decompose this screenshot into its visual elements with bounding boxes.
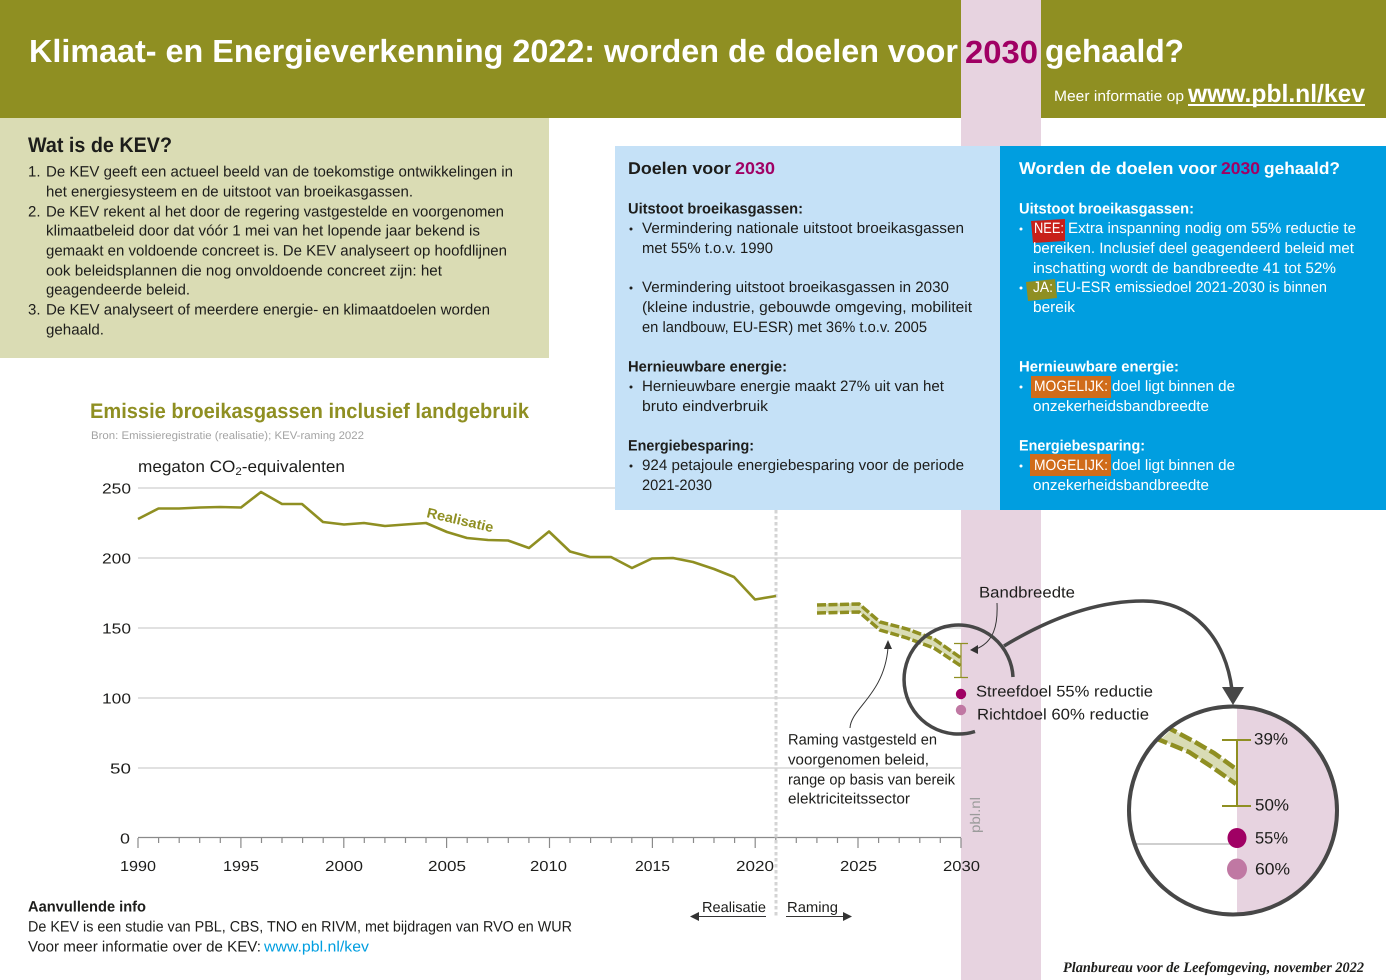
x axis labels	[120, 859, 980, 875]
y axis labels: 100	[102, 692, 131, 708]
answers energy saving: doel ligt binnen de	[1112, 457, 1235, 474]
x axis labels: 1995	[223, 859, 259, 875]
bandwidth bracket	[954, 644, 968, 678]
divider realisation / projection	[774, 510, 778, 918]
additional info	[28, 898, 572, 956]
badge: NEE: NEE:	[1034, 220, 1064, 237]
answers emissions: Uitstoot broeikasgassen:	[1019, 200, 1194, 218]
additional info: De KEV is een studie van PBL, CBS, TNO en RIVM, met bijdragen van RVO en WUR	[28, 918, 572, 936]
goals emissions: met 55% t.o.v. 1990	[642, 240, 773, 257]
zoomed bracket	[1222, 740, 1251, 806]
numbered list: 1.	[28, 164, 41, 180]
arrow: realisatie direction	[690, 900, 766, 921]
panel heading: Worden de doelen voor	[1019, 159, 1217, 178]
goals renewable energy: Hernieuwbare energie maakt 27% uit van het	[642, 378, 945, 395]
goals energy saving: Energiebesparing:	[628, 438, 754, 454]
numbered list: 2.	[28, 204, 41, 220]
arrow: realisatie direction: Realisatie	[702, 900, 766, 916]
answers emissions: Extra inspanning nodig om 55% reductie te	[1068, 220, 1356, 237]
answers renewable energy	[1019, 358, 1235, 415]
answers emissions: EU-ESR emissiedoel 2021-2030 is binnen	[1056, 279, 1327, 296]
goals renewable energy	[628, 358, 945, 415]
goals renewable energy: Hernieuwbare energie:	[628, 358, 787, 376]
annotation: raming description: voorgenomen beleid,	[788, 752, 929, 768]
annotation: target labels	[976, 684, 1153, 724]
goals emissions	[628, 200, 973, 336]
target dots	[956, 689, 966, 715]
y axis labels: 50	[110, 762, 131, 778]
zoomed labels: 60%	[1255, 860, 1290, 878]
answers emissions: inschatting wordt de bandbreedte 41 tot 52%	[1033, 260, 1336, 277]
panel: Doelen voor 2030	[615, 146, 1000, 510]
y axis labels: 250	[102, 482, 131, 498]
badge: MOGELIJK: MOGELIJK:	[1034, 378, 1108, 395]
numbered list	[28, 164, 513, 338]
panel heading: Doelen voor	[628, 159, 731, 178]
numbered list: ook beleidsplannen die nog onvoldoende concreet zijn: het	[46, 262, 443, 280]
y axis title: megaton CO	[138, 458, 232, 476]
numbered list: De KEV geeft een actueel beeld van de toekomstige ontwikkelingen in	[46, 164, 513, 180]
more information link	[1054, 80, 1365, 108]
panel heading: Wat is de KEV?	[28, 134, 172, 157]
goals energy saving: 924 petajoule energiebesparing voor de periode	[642, 457, 964, 474]
panel heading: 2030	[735, 159, 775, 178]
annotation: Bandbreedte	[970, 584, 1075, 654]
chart title: Emissie broeikasgassen inclusief landgebruik	[90, 400, 529, 423]
zoomed labels	[1254, 730, 1290, 878]
more information link: www.pbl.nl/kev	[1187, 80, 1365, 108]
gridlines	[138, 488, 961, 768]
panel heading	[1019, 159, 1340, 178]
zoomed labels: 55%	[1255, 830, 1288, 848]
answers emissions	[1019, 200, 1356, 316]
arrow: raming direction: Raming	[787, 900, 838, 916]
x axis labels: 2025	[840, 859, 877, 875]
title: 2030	[965, 34, 1038, 70]
goals renewable energy: bruto eindverbruik	[642, 398, 769, 415]
additional info: Aanvullende info	[28, 898, 146, 916]
y axis labels	[102, 482, 131, 848]
zoomed labels: 39%	[1254, 730, 1288, 748]
y axis title: 2	[235, 466, 242, 478]
chart: emissions	[90, 400, 980, 918]
annotation: raming description: elektriciteitssector	[788, 790, 910, 808]
badge: MOGELIJK: MOGELIJK:	[1034, 457, 1108, 474]
x axis labels: 2030	[943, 859, 980, 875]
zoom circle detail	[1129, 700, 1347, 920]
additional info: Voor meer informatie over de KEV:	[28, 938, 261, 956]
arrow: raming direction	[786, 900, 852, 921]
additional info: www.pbl.nl/kev	[263, 938, 370, 956]
credit line: Planbureau voor de Leefomgeving, november 2022	[1063, 960, 1364, 976]
title: gehaald?	[1045, 33, 1184, 69]
x axis labels: 2000	[325, 859, 363, 875]
badge: JA: JA:	[1033, 279, 1053, 296]
arrow to zoom circle	[1004, 601, 1244, 705]
projection band	[817, 603, 961, 666]
goals emissions: Vermindering nationale uitstoot broeikasgassen	[642, 220, 964, 237]
annotation: Bandbreedte: Bandbreedte	[979, 584, 1075, 602]
y axis labels: 0	[120, 832, 130, 848]
numbered list: het energiesysteem en de uitstoot van broeikasgassen.	[46, 184, 413, 200]
magnifier ring small	[904, 625, 1013, 734]
answers renewable energy: onzekerheidsbandbreedte	[1033, 398, 1209, 415]
numbered list: 3.	[28, 302, 41, 318]
zoomed labels: 50%	[1255, 796, 1289, 814]
answers energy saving: onzekerheidsbandbreedte	[1033, 477, 1209, 494]
watermark: pbl.nl: pbl.nl	[967, 797, 983, 833]
x axis labels: 2020	[736, 859, 774, 875]
realisation label: Realisatie	[425, 504, 495, 535]
numbered list: De KEV rekent al het door de regering vastgestelde en voorgenomen	[46, 204, 504, 220]
numbered list: gehaald.	[46, 322, 104, 338]
goals energy saving	[628, 438, 964, 494]
goals emissions: Vermindering uitstoot broeikasgassen in 2030	[642, 279, 949, 296]
answers emissions: bereiken. Inclusief deel geagendeerd beleid met	[1033, 240, 1355, 257]
numbered list: De KEV analyseert of meerdere energie- en klimaatdoelen worden	[46, 302, 490, 318]
y axis title: -equivalenten	[242, 458, 345, 476]
more information link: Meer informatie op	[1054, 88, 1184, 105]
answers energy saving: Energiebesparing:	[1019, 438, 1145, 454]
answers energy saving	[1019, 438, 1235, 494]
x axis labels: 2005	[428, 859, 466, 875]
annotation: raming description	[788, 640, 955, 808]
title: Klimaat- en Energieverkenning 2022: worden de doelen voor	[29, 33, 958, 69]
badge: JA	[1026, 279, 1057, 301]
numbered list: klimaatbeleid door dat vóór 1 mei van het lopende jaar bekend is	[46, 222, 480, 240]
panel heading: 2030	[1221, 159, 1260, 178]
x axis	[138, 838, 961, 848]
answers renewable energy: doel ligt binnen de	[1112, 378, 1235, 395]
answers emissions: bereik	[1033, 299, 1076, 316]
badge: NEE	[1031, 219, 1065, 243]
answers renewable energy: Hernieuwbare energie:	[1019, 358, 1179, 376]
panel: Worden de doelen gehaald	[1000, 146, 1386, 510]
annotation: raming description: Raming vastgesteld en	[788, 732, 937, 748]
y axis labels: 200	[102, 552, 131, 568]
goals emissions: (kleine industrie, gebouwde omgeving, mobiliteit	[642, 299, 973, 316]
annotation: target labels: Richtdoel 60% reductie	[977, 706, 1149, 724]
realisation line	[138, 492, 776, 600]
x axis labels: 1990	[120, 859, 156, 875]
pink 2030 column	[961, 0, 1041, 980]
goals emissions: Uitstoot broeikasgassen:	[628, 200, 803, 218]
zoomed target dots	[1227, 828, 1247, 880]
header banner	[0, 0, 1386, 118]
numbered list: gemaakt en voldoende concreet is. De KEV analyseert op hoofdlijnen	[46, 242, 507, 260]
y axis labels: 150	[102, 622, 131, 638]
panel heading	[628, 159, 775, 178]
goals energy saving: 2021-2030	[642, 477, 712, 494]
numbered list: geagendeerde beleid.	[46, 282, 190, 298]
annotation: raming description: range op basis van bereik	[788, 772, 955, 788]
x axis labels: 2010	[530, 859, 567, 875]
source line: Bron: Emissieregistratie (realisatie); KEV-raming 2022	[91, 430, 364, 442]
panel: Wat is de KEV	[0, 118, 549, 358]
panel heading: gehaald?	[1264, 159, 1340, 178]
x axis labels: 2015	[635, 859, 670, 875]
annotation: target labels: Streefdoel 55% reductie	[976, 684, 1153, 700]
goals emissions: en landbouw, EU-ESR) met 36% t.o.v. 2005	[642, 319, 927, 336]
